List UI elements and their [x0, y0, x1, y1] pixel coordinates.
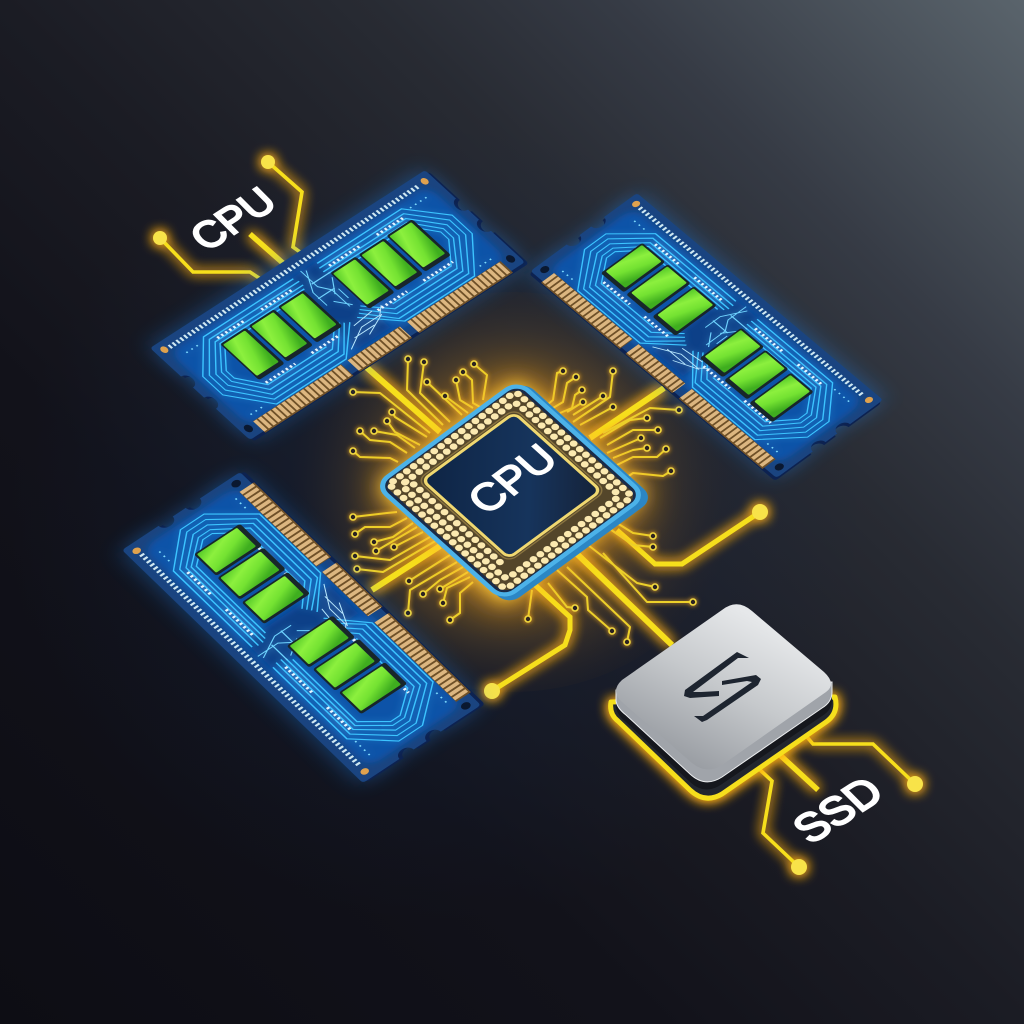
thick bus lines from CPU to modules and SSD	[365, 366, 672, 645]
SSD connector lines	[758, 737, 923, 875]
RAM module: top-left	[150, 169, 529, 442]
RAM module: top-right	[528, 193, 884, 481]
top-left connector lines	[153, 155, 302, 280]
navy ambient tint	[10, 120, 870, 920]
cpu amber glow	[287, 292, 737, 692]
CPU chip	[375, 378, 654, 608]
cpu label: CPU	[458, 437, 567, 522]
connector traces with end dots	[484, 504, 768, 699]
SSD drive	[611, 604, 836, 798]
cpu wide halo	[375, 378, 650, 608]
ssd side edge	[616, 682, 832, 782]
cpu halo	[378, 382, 646, 602]
ssd dark base	[616, 688, 832, 790]
ssd top surface	[616, 604, 831, 770]
thin CPU pin traces with ring terminals	[353, 359, 693, 642]
RAM module: bottom-left	[122, 470, 485, 784]
label: SSD: SSD	[783, 769, 894, 852]
cpu package	[375, 379, 654, 605]
label: CPU top-left: CPU	[180, 179, 285, 259]
ssd logo	[684, 652, 761, 722]
ssd glow plate	[611, 697, 836, 798]
